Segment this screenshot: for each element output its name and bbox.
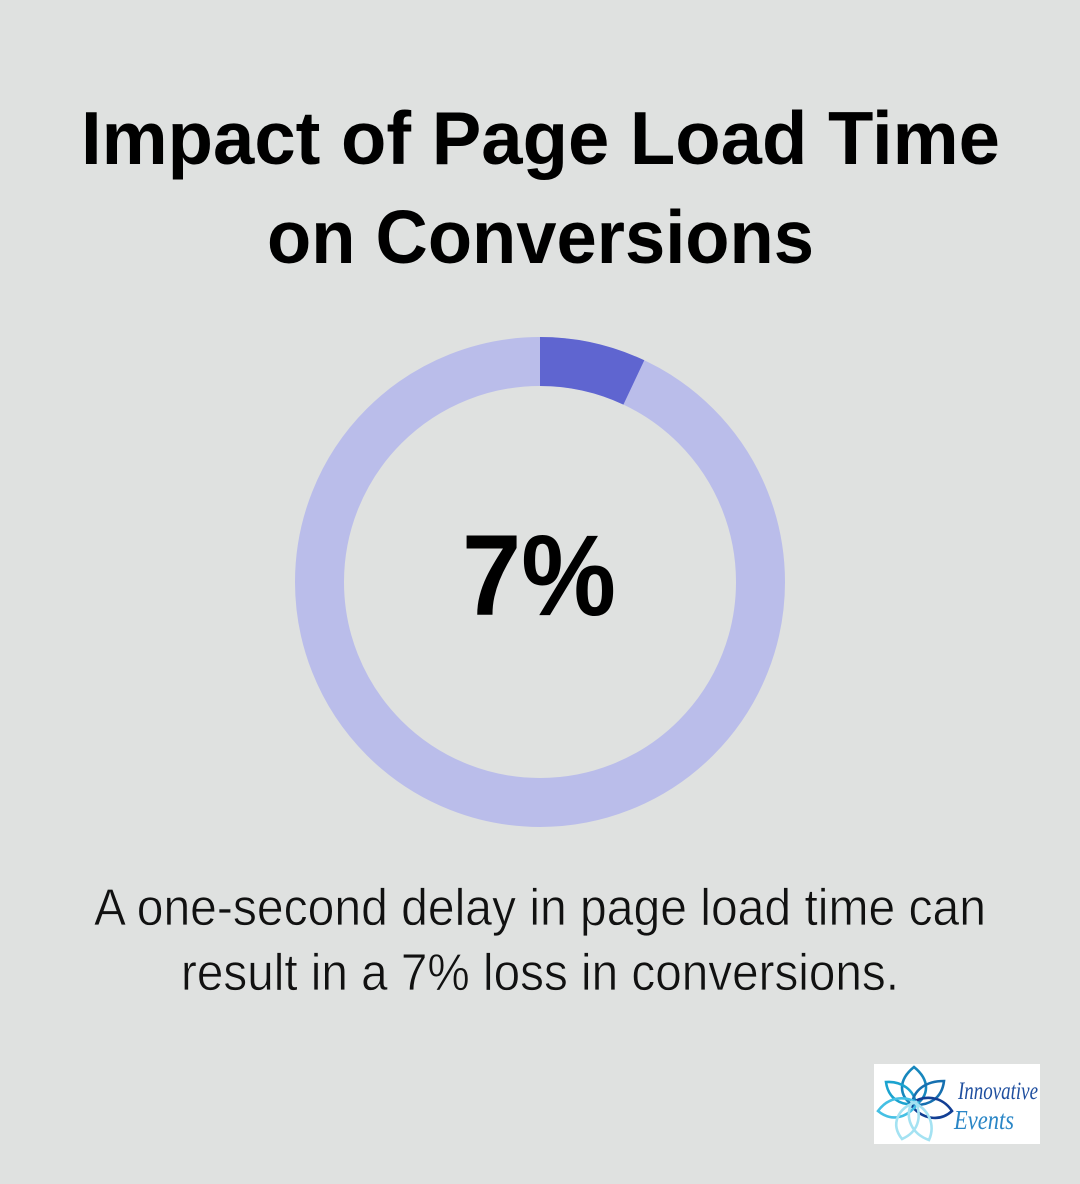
- description text: A one-second delay in page load time can: [94, 879, 986, 937]
- donut chart: 7%: [320, 337, 760, 802]
- description text: result in a 7% loss in conversions.: [181, 944, 899, 1002]
- logo wordmark: Innovative: [957, 1078, 1038, 1105]
- logo: Innovative Events: [874, 1064, 1040, 1144]
- title: on Conversions: [267, 195, 814, 279]
- description text: [94, 879, 986, 1002]
- title: [81, 96, 1000, 279]
- ring highlighted segment: [540, 337, 644, 405]
- title: Impact of Page Load Time: [81, 96, 1000, 180]
- icon: flower: [878, 1067, 952, 1140]
- logo wordmark: [953, 1078, 1038, 1135]
- center value: 7%: [462, 512, 616, 640]
- logo wordmark: Events: [953, 1105, 1014, 1135]
- ring track: [320, 362, 760, 802]
